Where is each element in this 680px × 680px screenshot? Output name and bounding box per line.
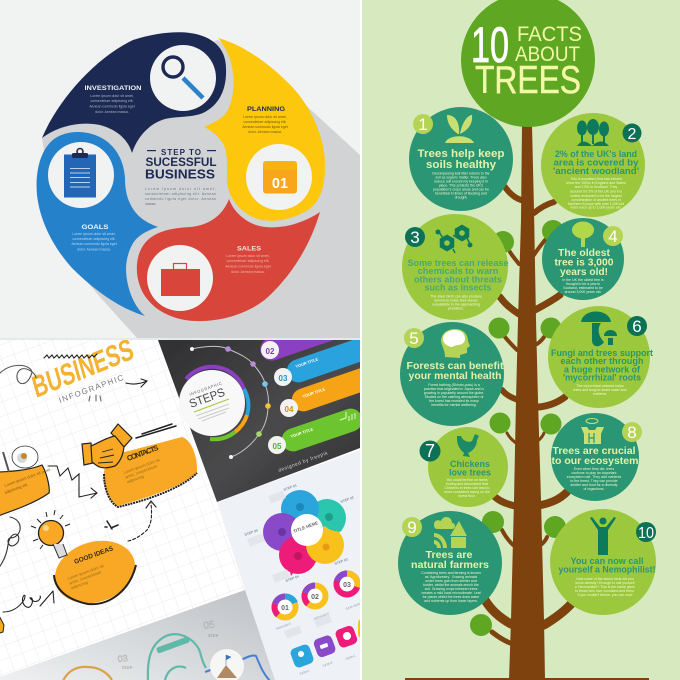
text: investigation body: Lorem ipsum dolor sit amet, [90, 94, 134, 98]
text: goals body: Aenean commodo ligula eget [71, 242, 117, 246]
fact 9: farmers: for plants whilst the trees draw water [423, 595, 480, 599]
fact 10: nemophilist: a 'Nemophilist'? This is the name given [575, 585, 635, 589]
text: investigation body: consectetuer adipiscing elit. [90, 99, 134, 103]
fact 2: ancient woodland: trees each up to 1,000 years old. [571, 206, 622, 210]
fact 10: nemophilist: If you couldn't before, you can now! [578, 593, 633, 597]
fact 1: soils: reduce soil erosion by keeping it in [434, 180, 488, 184]
label: step 05 [204, 620, 218, 637]
heading: business: BUSINESS [29, 333, 137, 405]
fact 7: chickens: love trees [449, 468, 491, 478]
icon: magnifying glass [163, 57, 203, 98]
fact 6: fungi [548, 306, 654, 408]
icon: purple square [314, 636, 336, 658]
badge: 4: 4 [608, 227, 618, 246]
label: step 03 [118, 654, 132, 669]
fact 9: farmers [398, 511, 502, 615]
text: sales body: Lorem ipsum dolor sit amet, [226, 254, 270, 258]
panel: flower diagram and rings [217, 450, 372, 680]
text: goals body: dolor. Aenean massa. [77, 248, 111, 252]
pill: step 05 green: YOUR TITLE [290, 426, 314, 439]
icon: light bulb [31, 510, 70, 558]
chart: five petal flower [263, 490, 346, 576]
fact 8: ecosystem: to our ecosystem [552, 456, 639, 467]
title: 10 facts about trees: FACTS [517, 22, 582, 46]
fact 4: oldest tree: years old! [560, 267, 608, 278]
badge: 1: 1 [418, 115, 428, 134]
fact 1: soils: Trees help keep [418, 148, 505, 160]
panel: business infographic doodle sheet [0, 333, 360, 680]
segment: goals [37, 132, 158, 316]
fact 3: chemicals: chemicals to warn [418, 266, 499, 277]
labels: ring captions: DATA SERIES [345, 601, 364, 611]
icon: calendar 01 [263, 161, 297, 194]
text: goals body: consectetuer adipiscing elit. [72, 237, 116, 241]
fact 9: farmers: Combining trees and farming is known [421, 571, 481, 575]
fact 3: chemicals [402, 214, 508, 320]
icon: head with brain [441, 329, 470, 358]
fact 7: chickens: forest floor. [458, 494, 476, 498]
text: central description [145, 187, 216, 206]
fact 9: farmers: fodder, whilst the animals enrich the [423, 583, 479, 587]
strip: white gutter [0, 338, 360, 340]
fact 1: soils: soil as organic matter. Trees also [435, 176, 487, 180]
doodle: scribbles and arrows [0, 354, 176, 612]
text: sales body [225, 254, 271, 274]
fact 4: oldest tree [542, 218, 624, 300]
fact 3: chemicals: unpalatable to the approaching [432, 302, 480, 306]
fact 1: soils: Decomposing leaf litter returns to the [432, 172, 490, 176]
labels: flower steps [244, 483, 354, 583]
fact 4: oldest tree: Scotland, estimated to be [563, 286, 603, 290]
fact 4: oldest tree: thought to be a yew in [566, 282, 600, 286]
labels: data captions [300, 654, 356, 675]
pill: step 02 purple [260, 340, 334, 361]
badge: step 02: 02 [266, 347, 275, 356]
text: sales body: Aenean commodo ligula eget [225, 264, 271, 268]
blob: contacts card: CONTACTS [126, 443, 160, 463]
text: planning body: Lorem ipsum dolor sit amet, [243, 115, 287, 119]
segment: investigation [42, 32, 226, 153]
icon: clipboard [64, 148, 96, 198]
fact 7: chickens: finding and discovered that [446, 482, 488, 486]
fact 2: ancient woodland: since the 1600s in England and Wales [566, 181, 626, 185]
title circle [461, 0, 595, 127]
fact 2: ancient woodland: account for 2% of the UK and it is [570, 190, 622, 194]
chart: ring 01: 01 [281, 605, 289, 612]
fact 10: nemophilist: Now some of the above facts did you [576, 577, 634, 581]
circle: infographic steps: INFOGRAPHIC [189, 381, 222, 397]
panel: 10 facts about trees [362, 0, 680, 680]
fact 6: fungi: each other through [560, 356, 644, 367]
icon: sprout [445, 115, 474, 143]
fact 1: soils [409, 107, 513, 211]
blob: top-left orange card [0, 446, 52, 517]
fact 3: chemicals: such as insects [424, 282, 492, 294]
blob: good ideas card [53, 540, 137, 606]
fact 6: fungi: a huge network of [564, 364, 641, 376]
badge: 10: 10 [638, 525, 654, 542]
fact 7: chickens [428, 427, 508, 507]
blob: bottom-left orange edge [0, 616, 4, 634]
badge: 8 [622, 422, 642, 442]
icon: farm [434, 517, 467, 548]
circle: infographic steps: STEPS [187, 385, 227, 411]
fact 1: soils: drought. [455, 196, 467, 200]
fact 9: farmers: under trees gain from shelter and [425, 579, 477, 583]
labels: data captions: DATA C [345, 653, 357, 661]
fact 2: ancient woodland [541, 113, 645, 217]
panel: numbered steps journey [0, 590, 275, 680]
blob: good ideas card: GOOD IDEAS [73, 545, 115, 566]
icon: three trees [577, 119, 609, 146]
fact 5: mental health: the forest has revealed its many [429, 399, 479, 403]
title: 10 facts about trees: 10 [471, 17, 509, 73]
pill: step 03 blue: YOUR TITLE [295, 356, 319, 369]
chart: ring 03 [336, 574, 358, 594]
icon: person [590, 517, 616, 555]
badge: 7 [420, 440, 440, 462]
fact 5: mental health: Forest bathing (Shinrin-yoku) is a [428, 383, 480, 387]
text: investigation body: dolor. Aenean massa. [95, 110, 129, 114]
fact 9: farmers: and nutrients up from lower layers. [424, 599, 478, 603]
fact 10: nemophilist: to those who love woodland and trees. [575, 589, 635, 593]
heading: planning: PLANNING [247, 106, 285, 113]
fact 9: farmers: Trees are [426, 550, 473, 561]
fact 2: ancient woodland: 'ancient woodland' [553, 166, 639, 176]
pill: step 04 orange: YOUR TITLE [302, 386, 326, 399]
icon: briefcase [161, 264, 200, 296]
fact 2: ancient woodland: 2% of the UK's land [555, 149, 637, 159]
icon: calendar 01: 01 [272, 176, 288, 192]
fact 8: ecosystem [551, 413, 639, 501]
chart: ring 02 [304, 586, 326, 606]
badge: 6: 6 [632, 317, 642, 336]
fact 8: ecosystem: of organisms. [583, 487, 605, 491]
text: designed by freepik: designed by freepik [278, 450, 329, 474]
chart: five petal flower: TITLE HERE [293, 520, 319, 534]
title: 10 facts about trees: TREES [475, 59, 581, 102]
blob: good ideas card: Lorem ipsum dolor sit [67, 563, 105, 581]
fact 9: farmers: creates a mild local microclimate. Leaf [421, 591, 481, 595]
fact 3: chemicals: others about threats [414, 274, 502, 286]
icon: yellow square [358, 620, 360, 638]
fact 3: chemicals: The silver birch can also produce [430, 294, 482, 298]
fact 4: oldest tree: around 3,000 years old. [565, 290, 601, 294]
heading: step to sucessful business [145, 148, 216, 182]
fact 7: chickens: You could be fine on farms [446, 478, 488, 482]
text: goals body: Lorem ipsum dolor sit amet, [72, 232, 116, 236]
text: investigation body [89, 94, 135, 114]
badge: 3 [405, 227, 425, 247]
text: central description: Lorem ipsum dolor sit amet, [145, 187, 216, 191]
badge: 9 [402, 517, 422, 537]
fact 3: chemicals: predators. [448, 306, 464, 310]
panel: step to successful business circular infographic [0, 0, 360, 338]
path: orange arch [63, 667, 112, 680]
badge: 4 [603, 226, 623, 246]
fact 2: ancient woodland: concentration of ancient trees in [571, 198, 621, 202]
text: goals body [71, 232, 117, 252]
path: teal outline step [148, 634, 206, 680]
labels: data captions: DATA A [299, 669, 310, 676]
badge: step 03: 03 [279, 374, 288, 383]
segment: sales [137, 199, 320, 321]
label: teal banner [156, 638, 190, 654]
connector line with nodes [192, 346, 268, 457]
text: infographic: INFOGRAPHIC [58, 373, 125, 405]
fact 10: nemophilist [550, 509, 656, 615]
fact 8: ecosystem: to the forest. They can provide [570, 479, 618, 483]
fact 7: chickens: Chickens in trees can lead to [445, 486, 490, 490]
fact 9: farmers: as 'Agroforestry'. Grazing animals [425, 575, 477, 579]
title: 10 facts about trees: ABOUT [515, 42, 580, 66]
blob: contacts card: adipiscing [126, 474, 144, 484]
labels: ring captions [276, 602, 360, 638]
fact 7: chickens: Chickens [450, 459, 490, 469]
blob: top-left orange card: Lorem ipsum dolor sit amet [4, 466, 52, 488]
heading: sales: SALES [237, 246, 262, 252]
fact 2: ancient woodland: and 1750 in Scotland. They [575, 185, 618, 189]
fact 5: mental health: growing in popularity around the globe. [424, 391, 484, 395]
badge: step 04 [280, 399, 298, 417]
fact 8: ecosystem: Trees are crucial [552, 446, 636, 457]
title: 10 facts about trees [471, 17, 582, 102]
badge: 5 [404, 328, 424, 348]
chart: ring 03: 03 [343, 582, 351, 589]
fact 3: chemicals: Some trees can release [408, 258, 508, 269]
badge: step 05: 05 [273, 442, 282, 451]
fact 2: ancient woodland: area is covered by [554, 158, 638, 168]
badge: 5: 5 [409, 329, 419, 348]
fact 3: chemicals: tannins to make their leaves [434, 298, 478, 302]
fact 2: ancient woodland: This is woodland that has existed [570, 177, 622, 181]
segment: planning [204, 38, 325, 221]
pill: step 03 blue [287, 340, 360, 382]
fact 2: ancient woodland: Northern Europe with over 1,000 old [568, 202, 624, 206]
badge: 7: 7 [425, 441, 435, 461]
badge: 6 [627, 316, 647, 336]
labels: flower steps: STEP 01 [283, 483, 297, 492]
text: central description: massa. [145, 202, 156, 206]
fact 6: fungi: trees and fungi to share water and [573, 388, 627, 392]
fact 5: mental health: Studies on the calming atmosphere of [425, 395, 483, 399]
heading: step to sucessful business: SUCESSFUL [146, 155, 216, 169]
fact 8: ecosystem: continue to play an important [572, 471, 616, 475]
fact 7: chickens: more consistent laying on the [444, 490, 490, 494]
text: planning body: dolor. Aenean massa. [248, 130, 282, 134]
fact 8: ecosystem: ecosystem role. They add nutrients [567, 475, 621, 479]
fact 8: ecosystem: shelter and food for a diversity [571, 483, 618, 487]
badge: 3: 3 [410, 228, 420, 247]
icon: pink square [336, 626, 358, 648]
fact 4: oldest tree: In the UK the oldest tree is [562, 278, 604, 282]
fact 1: soils: beneficial in times of flooding and [435, 192, 487, 196]
icon: handshake [82, 424, 132, 468]
panel: infographic steps on dark background [158, 340, 360, 502]
heading: goals: GOALS [82, 224, 109, 231]
blob: contacts card [104, 437, 197, 507]
badge: step 05 [268, 436, 286, 454]
green leaf dots [470, 220, 566, 636]
circle: infographic steps [179, 367, 248, 439]
badge: 2 [622, 124, 642, 143]
labels: ring captions: HIGHLIGHT [313, 612, 330, 621]
text: investigation body: Aenean commodo ligula eget [89, 104, 135, 108]
tree trunk and ground [405, 125, 649, 680]
label: step 05: STEP [208, 633, 219, 638]
icon: mountain flag circle [210, 649, 244, 680]
fact 6: fungi: 'mycorrhizal' roots [563, 372, 641, 384]
fact 10: nemophilist: You can now call [570, 556, 644, 566]
badge: 1 [413, 114, 433, 134]
fact 1: soils: place. This protects the UK's [439, 184, 483, 188]
fact 5: mental health [400, 322, 504, 426]
icon: molecules [436, 226, 472, 253]
label: step 03: STEP [122, 665, 133, 670]
fact 1: soils: population's crops areas and can be [433, 188, 489, 192]
badge: step 04: 04 [285, 405, 294, 414]
icon: tree [572, 222, 594, 247]
fact 6: fungi: Fungi and trees support [551, 348, 654, 359]
text: planning body: Aenean commodo ligula eget [242, 125, 288, 129]
labels: ring captions: HIGHLIGHT [275, 622, 292, 631]
fact 9: farmers: natural farmers [411, 560, 489, 571]
fact 4: oldest tree: The oldest [558, 248, 611, 259]
pill: step 04 orange [292, 368, 360, 412]
text: sales body: dolor. Aenean massa. [231, 270, 265, 274]
labels: flower steps: STEP 05 [244, 528, 258, 537]
label: step 03: 03 [117, 653, 128, 664]
badge: 2: 2 [628, 126, 637, 143]
text: planning body [242, 115, 288, 134]
badge: 9: 9 [407, 518, 417, 537]
badge: step 03 [274, 368, 292, 386]
labels: flower steps: STEP 04 [285, 574, 299, 583]
label: step 05: 05 [203, 619, 216, 632]
heading: step to sucessful business: BUSINESS [145, 168, 215, 182]
blob: contacts card: Lorem ipsum dolor sit [123, 457, 161, 475]
fact 6: fungi: nutrients. [593, 392, 607, 396]
fact 4: oldest tree: tree is 3,000 [554, 258, 614, 268]
fact 2: ancient woodland: widely reckoned to be the largest [570, 194, 622, 198]
blob: top-left orange card: adipiscing elit [4, 482, 29, 495]
fact 9: farmers: soil. Growing crops between trees [425, 587, 478, 591]
labels: data captions: DATA B [322, 661, 333, 668]
text: planning body: consectetuer adipiscing elit. [244, 120, 287, 124]
icon: mushrooms [581, 312, 617, 346]
text: central description: consectetuer adipiscing elit. Aenean [145, 192, 216, 196]
blob: good ideas card: adipiscing [70, 580, 88, 590]
heading: investigation: INVESTIGATION [84, 85, 142, 92]
icon: blue square [290, 644, 314, 668]
fact 5: mental health: benefits for mental wellbeing. [431, 403, 477, 407]
badge: step 02 [261, 341, 279, 359]
icon: tree stump [581, 418, 604, 444]
text: sales body: consectetuer adipiscing elit. [226, 259, 270, 263]
fact 5: mental health: practice that originated in Japan and is [424, 387, 484, 391]
labels: flower steps: STEP 03 [334, 557, 348, 566]
path: blue outline [205, 655, 270, 680]
fact 5: mental health: Forests can benefit [406, 360, 504, 372]
fact 10: nemophilist: know already? Enough to call yourself [576, 581, 635, 585]
blob: contacts card: amet, consectetuer [124, 463, 159, 480]
fact 10: nemophilist: yourself a Nemophilist! [558, 564, 656, 574]
fact 6: fungi: The mycorrhizal network helps [576, 384, 624, 388]
badge: 8: 8 [627, 423, 637, 442]
icon: chicken [457, 434, 479, 457]
fact 1: soils: soils healthy [426, 159, 497, 171]
fact 5: mental health: your mental health [408, 370, 502, 382]
blob: good ideas card: amet, consectetuer [68, 569, 103, 586]
pill: step 05 green [282, 408, 360, 452]
fact 8: ecosystem: Even when they die, trees [574, 467, 614, 471]
labels: flower steps: STEP 02 [340, 495, 354, 504]
chart: ring 01 [274, 596, 296, 618]
chart: ring 02: 02 [311, 594, 319, 601]
text: central description: commodo ligula eget dolor. Aenean [145, 197, 216, 201]
heading: step to sucessful business: STEP TO [161, 148, 201, 157]
